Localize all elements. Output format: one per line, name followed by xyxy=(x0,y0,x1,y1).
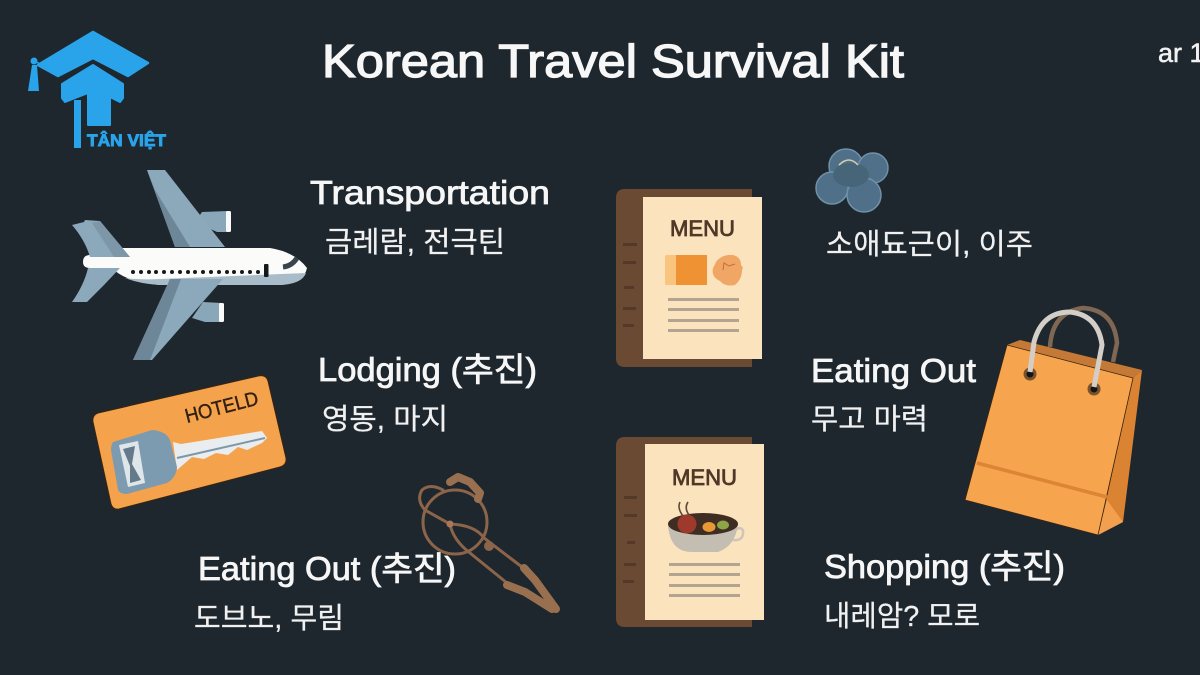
text block: eating out right xyxy=(811,352,976,436)
icon: menu with food: MENU xyxy=(670,216,735,241)
text block: transportation xyxy=(310,174,550,259)
logo: Tan Viet xyxy=(28,32,167,150)
text block: eating out right: Eating Out xyxy=(811,352,976,389)
text block: transportation: 금레람, 전극틴 xyxy=(325,227,505,259)
text block: shopping: Shopping (추진) xyxy=(824,548,1065,585)
text block: shopping: 내레암? 모로 xyxy=(824,601,980,633)
icon: airplane xyxy=(72,170,307,360)
text block: shopping xyxy=(824,548,1065,633)
text block: lodging: Lodging (추진) xyxy=(318,351,537,388)
icon: hotel key card xyxy=(93,376,286,509)
text block: transportation: Transportation xyxy=(310,174,550,211)
text block: eating out left xyxy=(194,550,456,635)
text block: eating out left: 도브노, 무림 xyxy=(194,603,344,635)
title: Korean Travel Survival Kit xyxy=(322,35,904,87)
text block: eating out right: 무고 마력 xyxy=(811,404,928,436)
text block: lodging: 영동, 마지 xyxy=(322,404,448,436)
icon: blue stones xyxy=(816,149,888,212)
text block: top right korean: 소애됴근이, 이주 xyxy=(826,229,1033,261)
icon: menu with soup bowl xyxy=(616,437,764,627)
text block: lodging xyxy=(318,351,537,436)
icon: menu with soup bowl: MENU xyxy=(672,465,737,490)
text block: eating out left: Eating Out (추진) xyxy=(198,550,456,587)
icon: menu with food xyxy=(616,189,762,367)
logo: Tan Viet: TÂN VIỆT xyxy=(87,131,167,150)
icon: hotel key card: HOTELD xyxy=(183,388,261,428)
icon: brown tool xyxy=(420,477,556,609)
icon: shopping bag xyxy=(965,308,1142,535)
